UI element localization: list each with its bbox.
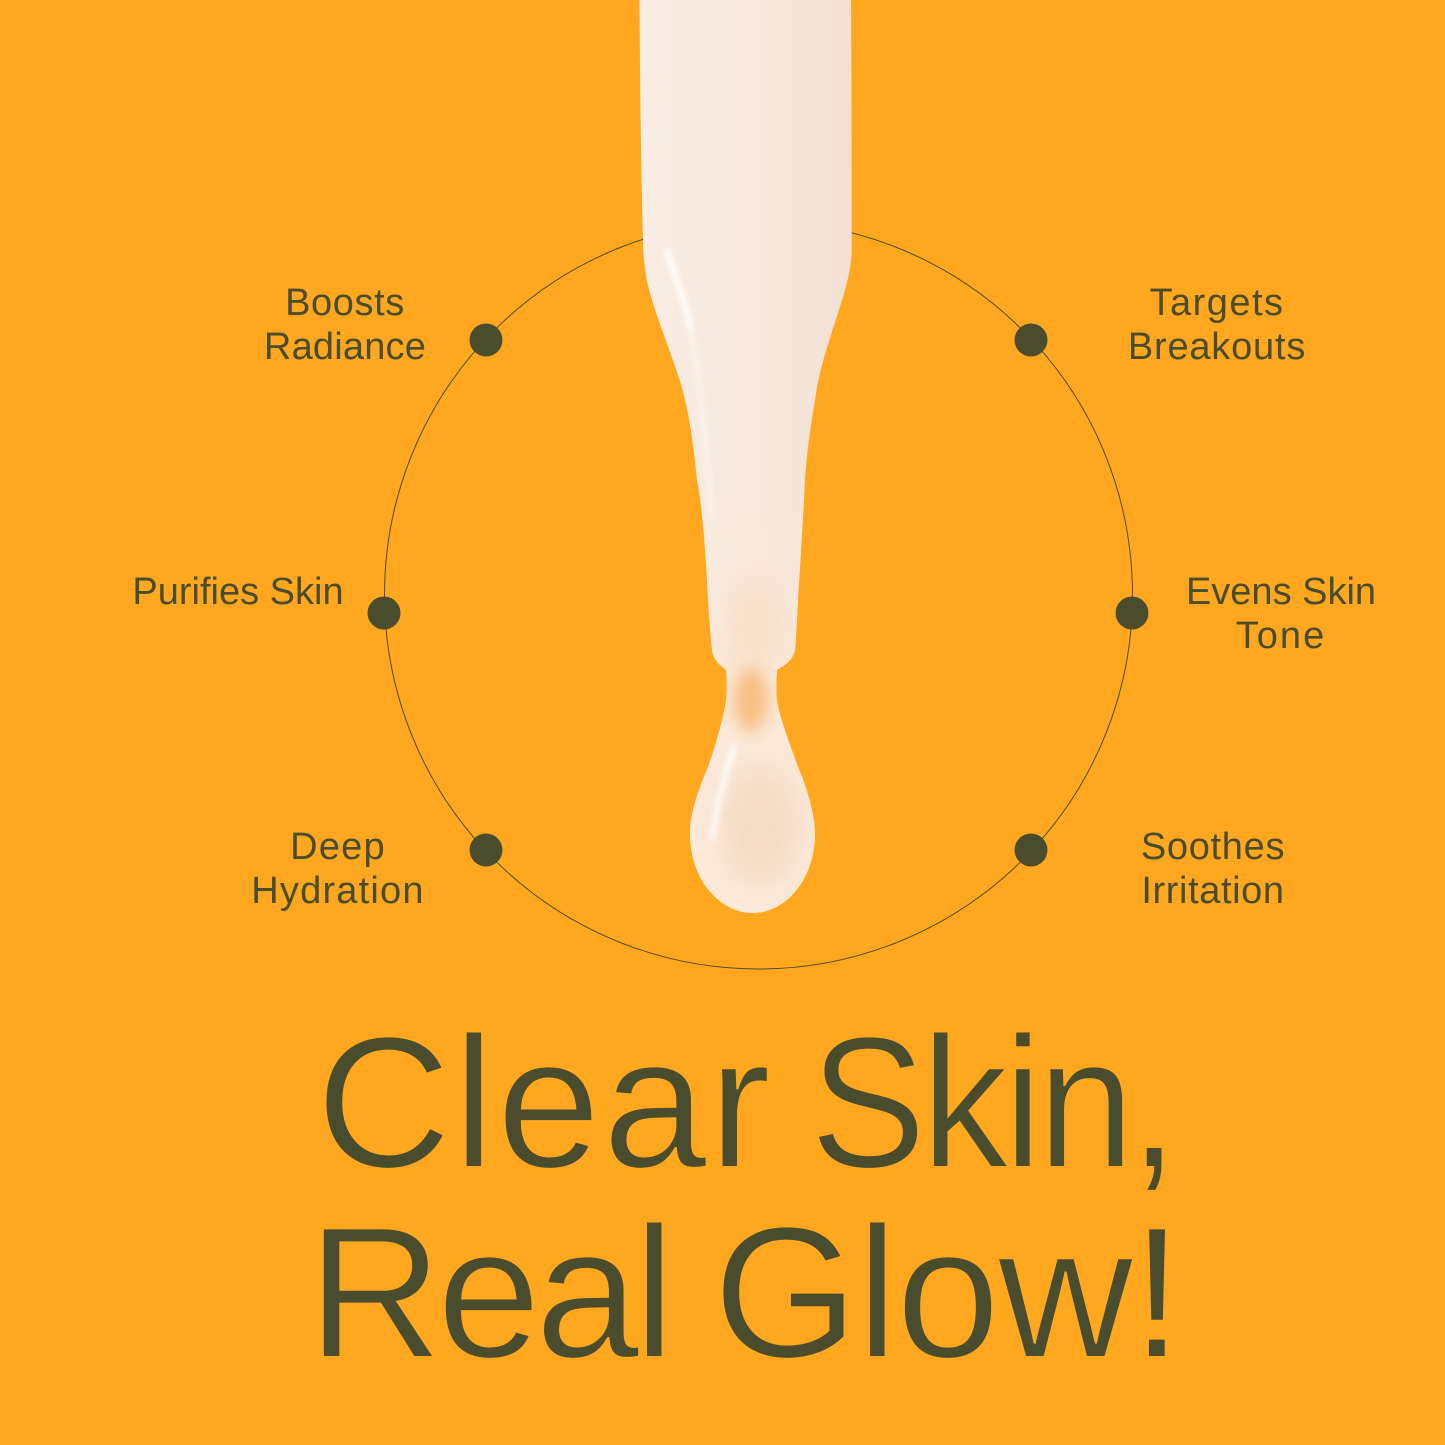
- label: Evens Skin Tone: Evens Skin: [1186, 571, 1376, 613]
- headline line 1: [316, 998, 1173, 1207]
- headline line 2: Real: [308, 1188, 669, 1397]
- label: Evens Skin Tone: Tone: [1236, 615, 1326, 657]
- label: Boosts Radiance: [264, 282, 426, 368]
- label: Soothes Irritation: Soothes: [1141, 826, 1285, 868]
- headline line 1: Clear: [316, 998, 773, 1207]
- label: Deep Hydration: Deep: [290, 826, 386, 868]
- headline line 2: Glow!: [713, 1188, 1181, 1397]
- label: Boosts Radiance: Radiance: [264, 326, 426, 368]
- label: Purifies Skin: Purifies Skin: [132, 571, 344, 613]
- label: Deep Hydration: Hydration: [251, 870, 425, 912]
- headline line 2: [308, 1188, 1181, 1397]
- label: Targets Breakouts: Targets: [1149, 282, 1285, 324]
- label: Boosts Radiance: Boosts: [285, 282, 405, 324]
- headline line 1: Skin,: [810, 998, 1173, 1207]
- label: Targets Breakouts: [1128, 282, 1306, 368]
- label: Evens Skin Tone: [1186, 571, 1376, 657]
- label: Soothes Irritation: [1141, 826, 1285, 912]
- label: Deep Hydration: [251, 826, 425, 912]
- label: Targets Breakouts: Breakouts: [1128, 326, 1306, 368]
- label: Soothes Irritation: Irritation: [1141, 870, 1285, 912]
- dropper with serum drop: [640, 0, 852, 913]
